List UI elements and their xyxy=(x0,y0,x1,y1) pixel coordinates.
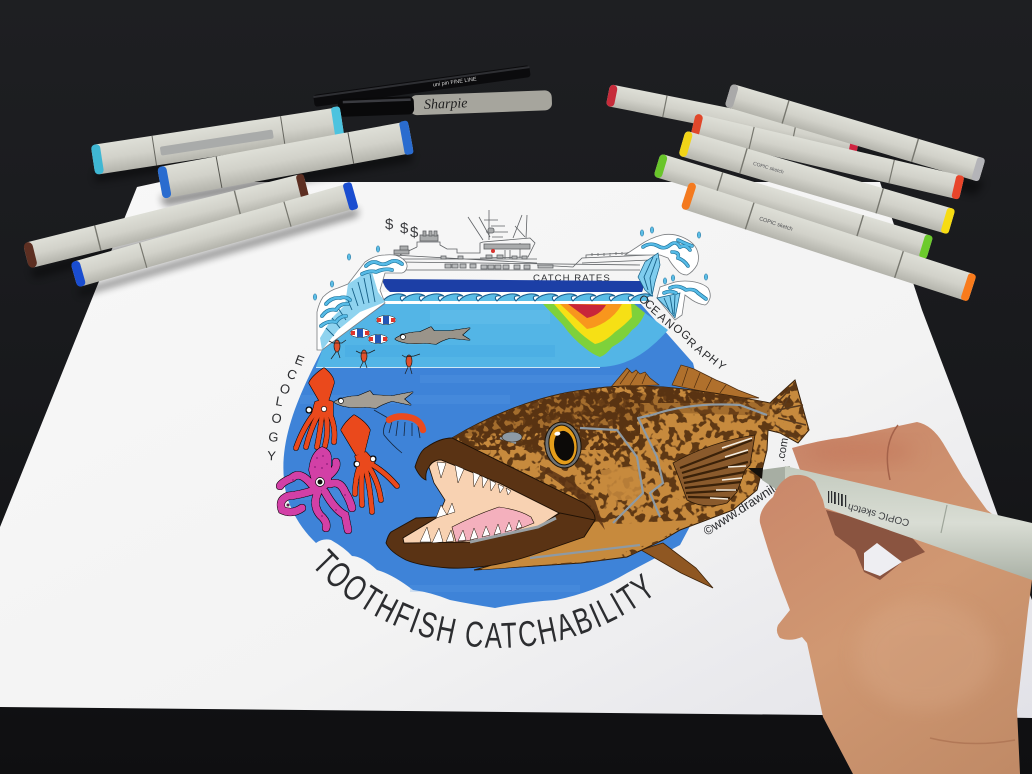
hand shape xyxy=(762,422,1032,774)
oceanographic heat map xyxy=(542,303,645,357)
sharpie pen xyxy=(338,90,552,118)
copic barrel xyxy=(785,466,1032,580)
wave band under hull xyxy=(382,292,653,304)
dorsal fins xyxy=(611,365,759,398)
fine liner label: uni pin FINE LINE xyxy=(433,76,477,88)
silver fish, upper xyxy=(395,327,470,344)
orange-red marker xyxy=(690,113,964,200)
fish eye xyxy=(542,420,584,470)
surface water layer, light blue xyxy=(316,304,668,368)
krill xyxy=(329,340,420,374)
striped fish 1 xyxy=(376,316,396,324)
left wave column lines xyxy=(326,274,375,336)
gap between fingers xyxy=(864,543,902,576)
heat map: green band xyxy=(542,303,645,357)
fish flank xyxy=(452,380,809,570)
skin tone shading xyxy=(829,438,986,702)
pelvic fin xyxy=(641,543,713,588)
gill spot xyxy=(502,432,522,442)
ship stacks xyxy=(394,228,530,254)
krill 2 xyxy=(356,350,375,368)
copic nib tip xyxy=(748,468,763,479)
copyright URL: ©www.drawnill xyxy=(700,480,780,539)
white paper sheet xyxy=(0,182,1032,718)
navy ship hull xyxy=(382,279,643,292)
left breaking waves xyxy=(313,246,407,350)
marker clip xyxy=(160,130,274,156)
tongue xyxy=(452,507,534,542)
copic nib xyxy=(760,466,790,496)
thumb xyxy=(760,475,850,610)
pink octopus xyxy=(280,447,352,530)
ship superstructure xyxy=(400,238,535,259)
right wave spray drops xyxy=(640,227,708,284)
lower teeth xyxy=(420,503,522,543)
left wave outline xyxy=(317,255,407,350)
ship hull lines xyxy=(393,255,650,270)
striped fish 3 xyxy=(368,334,388,344)
krill 1 xyxy=(329,340,346,359)
striped fish 2 xyxy=(350,328,370,338)
marker shadows xyxy=(30,135,985,296)
heat map: yellow band xyxy=(553,303,632,344)
toothfish body xyxy=(386,365,820,588)
left wave spray drops xyxy=(313,246,380,300)
mouth interior xyxy=(403,460,559,543)
red dot on ship xyxy=(491,249,495,253)
copic barcode xyxy=(828,491,846,507)
hand xyxy=(762,422,1032,774)
blue ocean circle xyxy=(283,303,720,608)
yellow marker print: COPIC sketch xyxy=(752,161,784,176)
ecology label: ECOLOGY xyxy=(267,352,307,463)
blue marker, large xyxy=(157,120,414,200)
silver fish, lower xyxy=(334,391,413,408)
gum line xyxy=(470,518,556,542)
cyan marker xyxy=(91,106,345,176)
oceanography label: OCEANOGRAPHY xyxy=(636,293,728,373)
blue marker, dark xyxy=(70,182,359,288)
green marker xyxy=(654,154,933,259)
heat map: orange band xyxy=(560,304,622,329)
copic brand text: COPIC sketch xyxy=(847,501,911,528)
brown marker xyxy=(23,173,310,269)
tail rays xyxy=(775,384,806,440)
dollar signs: $ xyxy=(400,220,409,237)
copic marker in hand xyxy=(748,466,1032,580)
red shrimp xyxy=(374,410,423,453)
striped small fish school xyxy=(350,316,396,344)
right breaking waves xyxy=(625,227,710,320)
orange marker print: COPIC sketch xyxy=(758,216,793,233)
bow railing xyxy=(586,251,650,258)
pectoral fin xyxy=(673,435,755,506)
orange marker xyxy=(681,182,977,302)
copic seam xyxy=(941,505,947,533)
sharpie label: Sharpie xyxy=(424,96,468,113)
black fine liner pen xyxy=(313,65,531,107)
lateral lines xyxy=(500,404,767,558)
heat map: red core xyxy=(568,304,606,318)
red squid, upper xyxy=(296,368,334,448)
left wave foam strokes xyxy=(321,261,402,326)
inner finger shadows xyxy=(826,510,925,580)
knuckle crease xyxy=(887,425,898,480)
left wave water columns xyxy=(320,272,385,350)
fish mottling xyxy=(440,380,820,570)
grey marker xyxy=(725,83,985,182)
krill 3 xyxy=(402,354,420,374)
right wave column lines xyxy=(644,257,675,316)
ship masts and rigging xyxy=(468,210,527,240)
right wave outline xyxy=(625,234,710,320)
dollar signs: $ xyxy=(410,224,419,241)
lips and jaw xyxy=(386,438,595,568)
right wave foam strokes xyxy=(643,240,706,299)
red squid, lower xyxy=(341,415,397,512)
ship windows xyxy=(441,255,553,269)
upper teeth xyxy=(437,462,511,495)
dollar signs: $ xyxy=(385,216,394,233)
fish cheek xyxy=(540,465,605,530)
wrist crease xyxy=(930,738,1015,744)
url suffix: .com xyxy=(775,437,791,463)
catch rates label: CATCH RATES xyxy=(533,273,611,284)
red marker xyxy=(606,84,860,156)
yellow marker xyxy=(678,131,955,234)
right wave water columns xyxy=(638,253,680,318)
illustration: research ship xyxy=(393,210,650,270)
curved title: TOOTHFISH CATCHABILITY xyxy=(316,548,652,648)
marker texture bands xyxy=(295,375,650,592)
